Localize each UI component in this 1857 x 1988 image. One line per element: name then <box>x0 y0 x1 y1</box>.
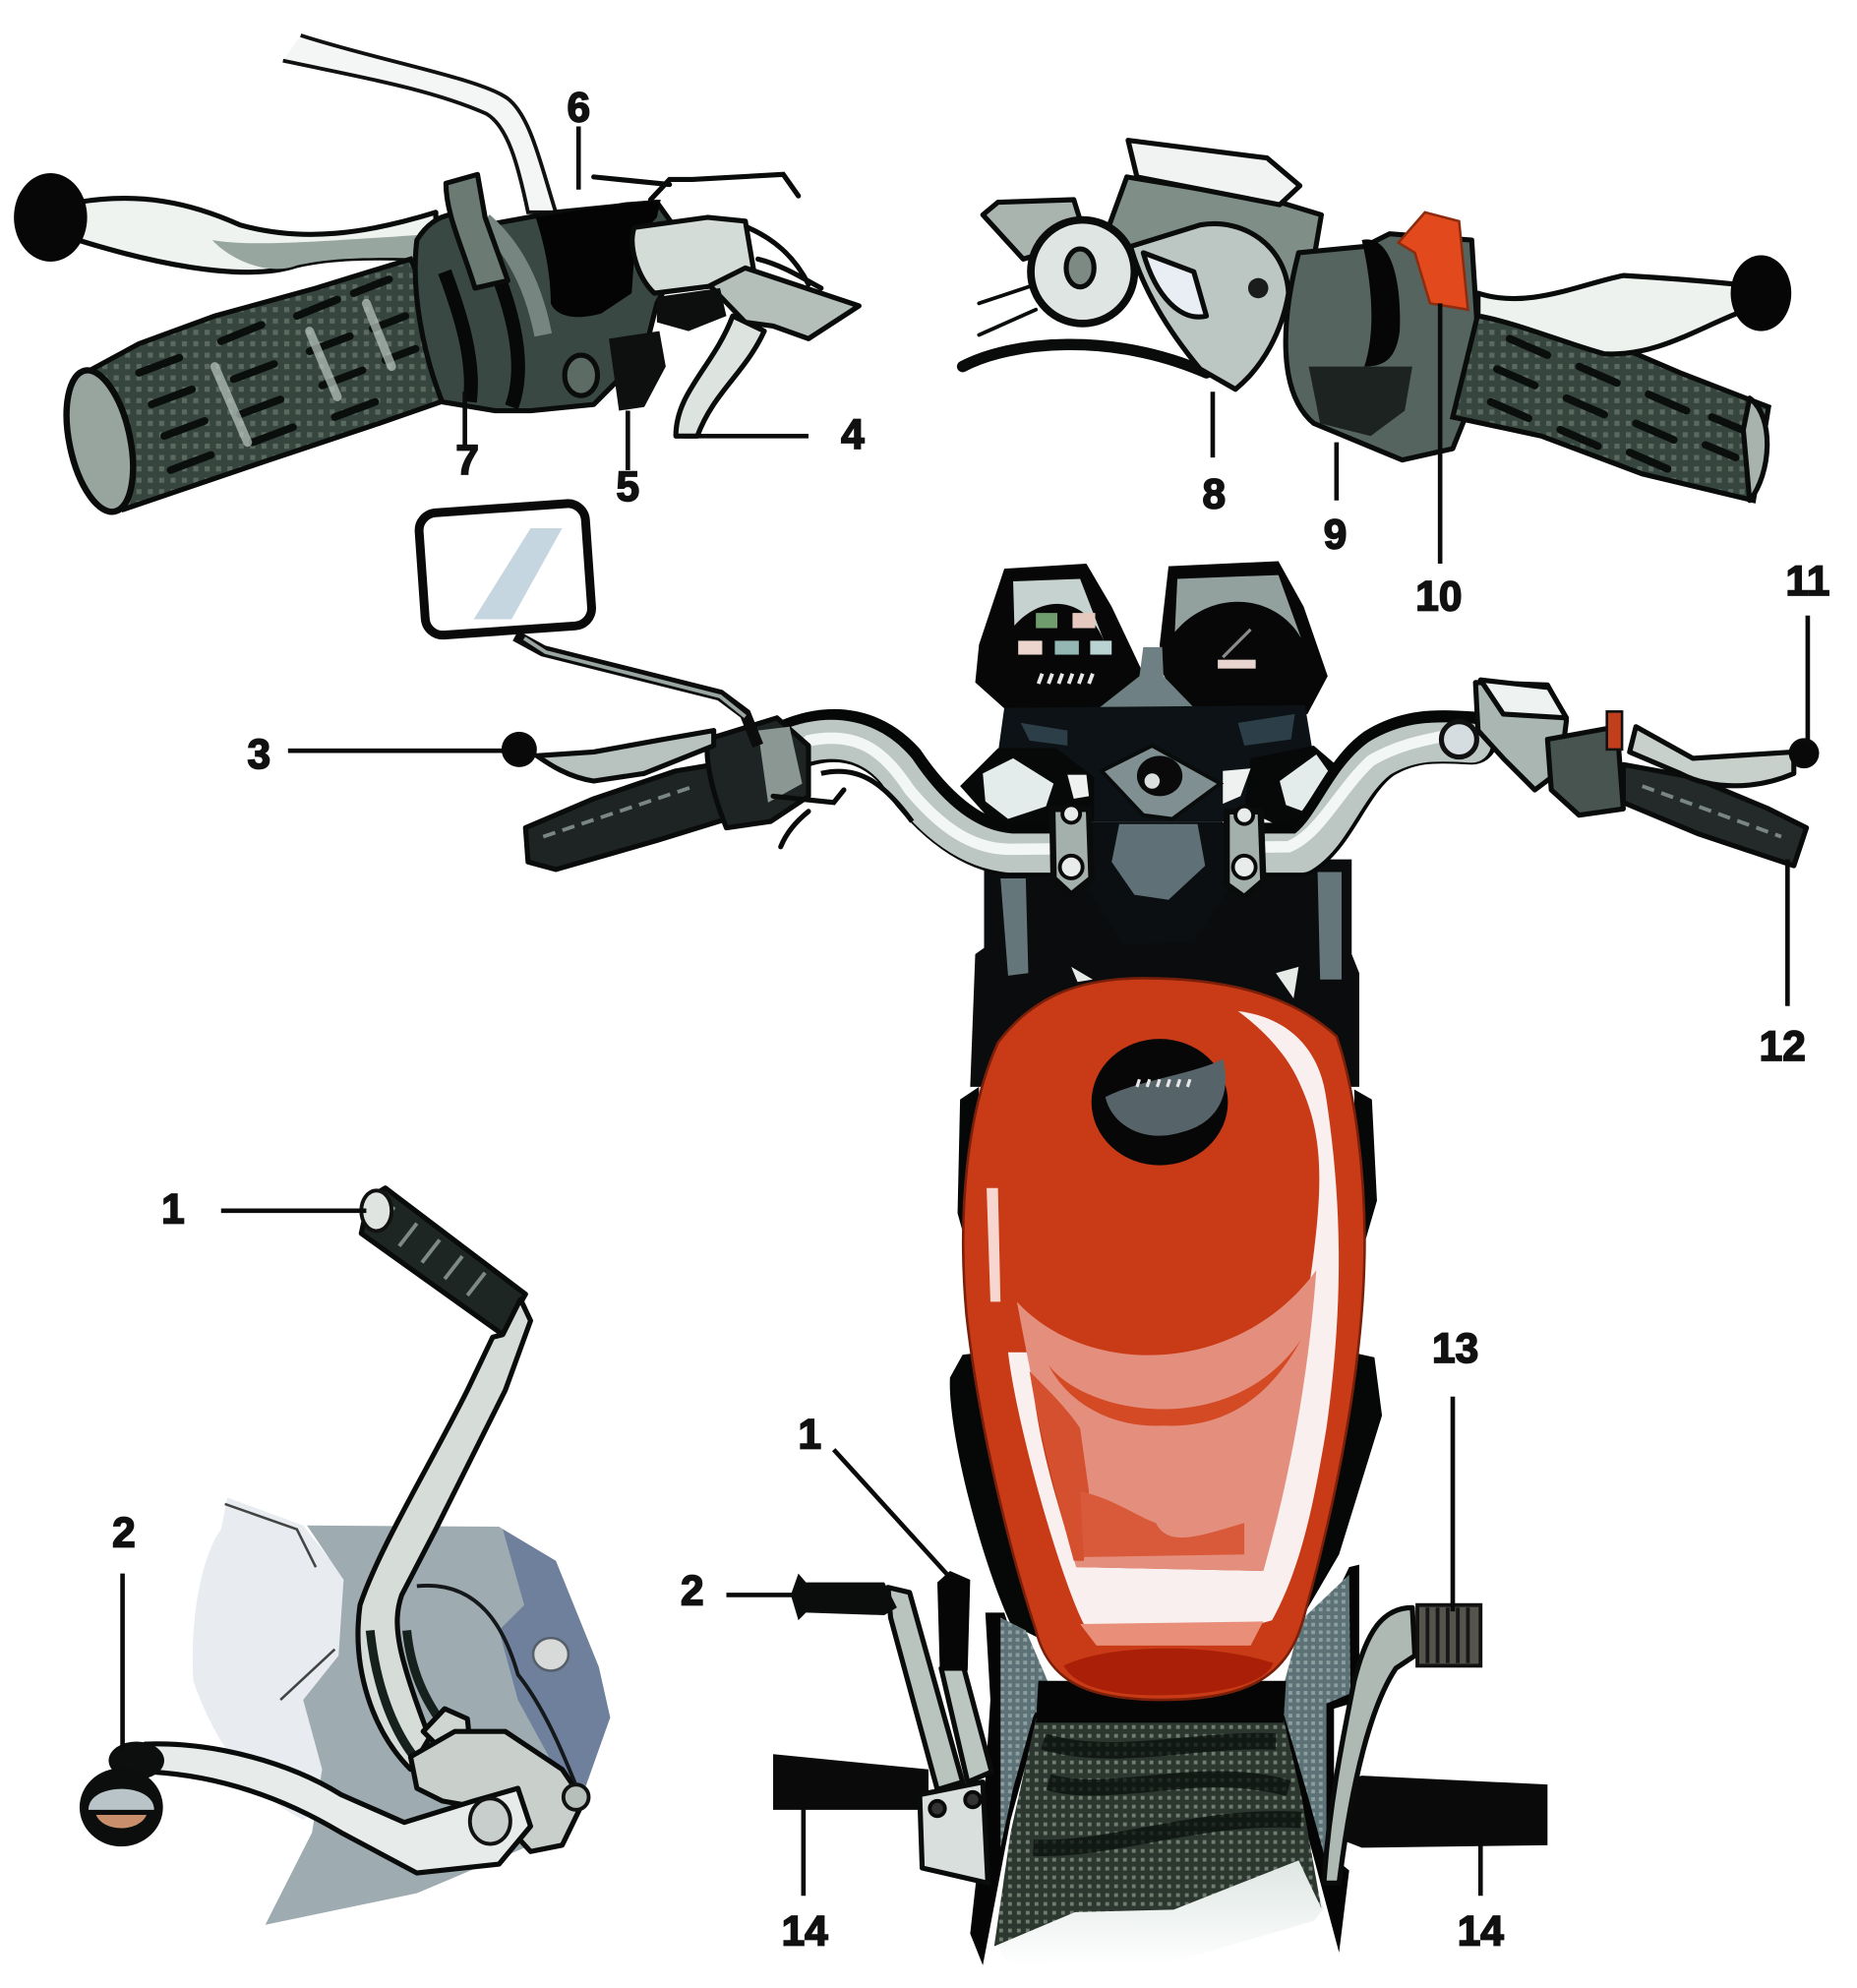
right grip slots <box>1491 338 1742 469</box>
indicator marks <box>1039 674 1093 684</box>
right switch small <box>1547 727 1623 815</box>
right small white <box>1223 768 1251 804</box>
fuel tank <box>963 978 1364 1700</box>
rear left black edge <box>970 1612 1039 1965</box>
warning lamps <box>1018 613 1111 655</box>
fork right highlight <box>1318 873 1342 980</box>
part number labels: 7 <box>455 437 479 483</box>
part number labels: 14 <box>782 1907 828 1954</box>
right grip <box>1453 303 1768 501</box>
hoses <box>963 344 1207 373</box>
fork left highlight <box>1000 878 1028 976</box>
switch housing <box>415 203 689 411</box>
part number labels: 9 <box>1324 512 1347 558</box>
triple clamp <box>1102 746 1221 819</box>
lever shaded neck <box>212 234 436 269</box>
right switch housing <box>1286 234 1480 460</box>
right grip dash <box>1643 786 1781 837</box>
centre cover <box>1089 821 1231 945</box>
pedal tip <box>1417 1605 1480 1665</box>
knob face <box>89 1789 154 1810</box>
dark band under pods <box>998 705 1314 821</box>
right brake bracket <box>1475 683 1567 790</box>
cover outline <box>225 1504 334 1700</box>
lever arm <box>676 316 764 436</box>
speedo tag <box>1218 660 1256 669</box>
end bolt <box>564 1784 589 1810</box>
left lever <box>537 731 714 781</box>
bar clamp left <box>1052 809 1092 895</box>
diagram: kick starter and gear lever detail <box>80 1188 610 1925</box>
gear arm <box>146 1744 530 1873</box>
red kill switch <box>1399 212 1468 310</box>
black side right upper <box>1354 1090 1377 1270</box>
banjo cable stub <box>983 200 1087 259</box>
slotted screw <box>1066 249 1094 287</box>
grip end cap <box>55 364 145 517</box>
tank red crescent <box>1048 1340 1301 1425</box>
ignition highlight <box>1145 773 1160 789</box>
left grip mid highlight <box>543 786 694 837</box>
mirror stem <box>515 635 758 746</box>
right small grip <box>1623 764 1807 866</box>
centre highlight <box>1111 824 1205 900</box>
part number labels: 13 <box>1432 1325 1478 1371</box>
master lever body <box>1130 223 1288 390</box>
collar shadows <box>445 271 518 407</box>
gear shaft top view <box>888 1588 963 1789</box>
pale engine cover <box>193 1497 366 1820</box>
cable connector <box>594 174 799 200</box>
handlebar chrome <box>790 740 1471 853</box>
left bracket white <box>983 758 1053 819</box>
right end cap <box>1743 398 1767 501</box>
housing black band <box>1362 239 1400 367</box>
peg left <box>773 1754 928 1810</box>
kick grip end <box>361 1190 391 1231</box>
banjo bolt disc <box>1031 220 1134 324</box>
seat dark strokes <box>1034 1741 1301 1848</box>
rear right side panel <box>1280 1575 1350 1863</box>
tank left red inner <box>1030 1371 1089 1561</box>
left switch chrome <box>758 727 803 803</box>
tank white rim <box>1008 1011 1339 1633</box>
black window <box>1309 367 1412 436</box>
knob cluster 5 <box>609 331 666 411</box>
lever hinge bolt <box>1248 278 1268 298</box>
right instrument pod <box>1160 561 1328 727</box>
diagram: right handlebar control detail <box>963 141 1791 501</box>
rear right black edge <box>1276 1565 1359 1953</box>
pivot bolt <box>470 1798 510 1844</box>
peg bracket bolts <box>929 1792 981 1816</box>
diagram: motorcycle top view <box>418 503 1819 1966</box>
cables <box>283 35 556 212</box>
small round screw <box>565 355 597 395</box>
right lever blade <box>1478 275 1737 354</box>
part number labels: 8 <box>1202 470 1226 516</box>
fuel cap <box>1092 1039 1228 1166</box>
rear left side panel <box>1000 1618 1049 1847</box>
dark blue side <box>499 1530 610 1792</box>
fuel cap marks <box>1137 1079 1190 1087</box>
kick arm <box>358 1299 530 1770</box>
clamp bolts <box>1060 805 1256 878</box>
speedometer needle <box>1223 630 1251 657</box>
black frame left <box>950 1353 1048 1643</box>
brake lever <box>710 268 859 338</box>
throttle grip <box>79 259 470 510</box>
grip slots <box>139 279 416 470</box>
tank lower pink area <box>1017 1270 1316 1571</box>
bolt <box>533 1638 569 1671</box>
collar light band <box>484 221 543 334</box>
lever fingers <box>748 227 821 288</box>
handlebar outline <box>790 736 1471 849</box>
kick grip <box>361 1188 525 1335</box>
tank bottom red wedge <box>1080 1491 1244 1557</box>
left grip small <box>525 764 739 870</box>
mirror <box>418 503 593 636</box>
handlebar inner divide <box>821 771 912 821</box>
kick grip ribs <box>377 1207 485 1295</box>
seat base fade <box>993 1851 1324 1966</box>
ball 3 <box>502 732 537 767</box>
brake lever small <box>773 790 844 847</box>
right lid <box>1480 680 1567 718</box>
part number labels: 1 <box>161 1186 185 1233</box>
part number labels: 3 <box>248 731 270 777</box>
pod centre junction <box>1087 647 1200 718</box>
brake pedal <box>1324 1607 1414 1883</box>
tank lower pink below band <box>1080 1621 1263 1646</box>
part number labels: 2 <box>681 1568 704 1614</box>
right lever ball <box>1731 256 1791 331</box>
right banjo <box>1441 722 1476 757</box>
kick pivot <box>423 1709 470 1757</box>
gear knob stem <box>108 1741 164 1779</box>
left instrument pod <box>976 564 1145 727</box>
chrome clamp <box>632 217 755 293</box>
band blue highlights <box>1021 714 1294 746</box>
part number labels: 14 <box>1458 1907 1504 1954</box>
red switch small <box>1607 711 1622 750</box>
part number labels: 1 <box>798 1411 821 1457</box>
black frame right <box>1286 1353 1382 1637</box>
left switch block <box>707 718 809 828</box>
left pod glass <box>1013 578 1106 644</box>
gear knob <box>80 1768 163 1846</box>
black strip under tank <box>1036 1681 1286 1722</box>
left bracket <box>960 749 1094 831</box>
lever ball <box>14 173 88 262</box>
gray cover <box>266 1526 610 1925</box>
switch tab <box>446 174 508 288</box>
kick grip black <box>937 1571 970 1671</box>
hose thin <box>979 284 1036 334</box>
part number labels: 11 <box>1786 558 1829 604</box>
right bracket <box>1244 746 1358 828</box>
part number labels: 12 <box>1760 1023 1806 1069</box>
grip light bands <box>214 303 391 443</box>
raised cover edge <box>417 1586 578 1792</box>
reservoir lid <box>1128 141 1300 205</box>
peg bracket <box>920 1782 988 1883</box>
diagram: left handlebar control detail <box>14 35 859 517</box>
part number labels: 4 <box>841 411 865 457</box>
fuel cap face <box>1106 1059 1226 1136</box>
peg right <box>1339 1776 1547 1847</box>
dark under lever <box>657 288 727 331</box>
kick shaft top view <box>941 1668 991 1782</box>
seat <box>994 1718 1321 1947</box>
mirror stem highlight <box>524 638 746 716</box>
right small lever <box>1630 727 1794 786</box>
knob warm <box>96 1815 147 1828</box>
shiny insert <box>1143 253 1207 317</box>
ball 11 <box>1789 738 1819 768</box>
part number labels: 6 <box>567 84 590 130</box>
mirror reflection <box>474 528 563 620</box>
tank left streak <box>987 1188 1000 1301</box>
black switch block <box>536 200 661 317</box>
part number labels: 10 <box>1415 573 1462 620</box>
part number labels: 2 <box>112 1510 136 1556</box>
left small white <box>1067 775 1089 799</box>
kick arm inner shadow <box>370 1630 449 1763</box>
reservoir body <box>1102 177 1321 316</box>
ignition <box>1137 755 1182 796</box>
handlebar shine <box>809 736 1447 849</box>
gear grip <box>791 1574 897 1620</box>
bar clamp right <box>1227 812 1263 897</box>
white gaps by forks <box>1071 967 1298 998</box>
right pod glass <box>1174 575 1301 638</box>
pivot plate <box>410 1731 583 1851</box>
clutch lever <box>79 199 436 272</box>
tank rear recess <box>1063 1649 1274 1695</box>
part number labels: 5 <box>617 463 639 510</box>
right bracket white <box>1280 754 1342 815</box>
black side left upper <box>958 1087 979 1277</box>
frame and fork area <box>970 860 1359 1087</box>
pedal ribs <box>1427 1607 1468 1663</box>
